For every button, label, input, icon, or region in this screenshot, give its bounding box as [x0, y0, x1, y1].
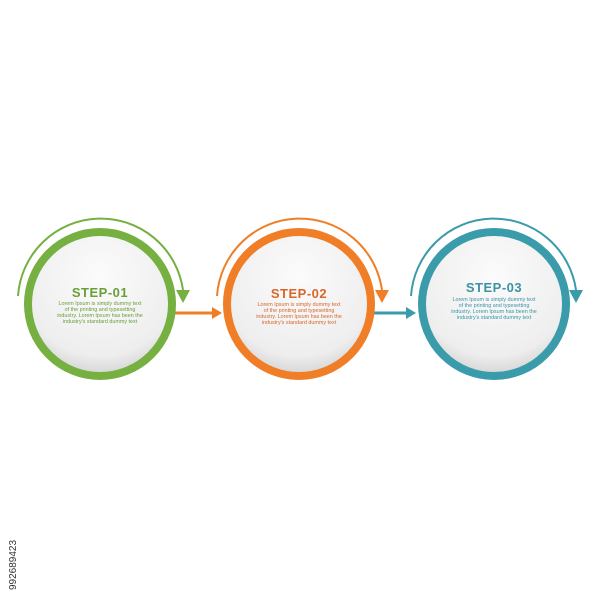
body 3: industry's standard dummy text: [457, 315, 532, 321]
body 1: [57, 301, 143, 325]
arrow: step 1 to 2: [172, 307, 222, 319]
arc arrow 2: [217, 219, 389, 303]
body 3: industry. Lorem Ipsum has been the: [451, 309, 537, 315]
body 2: of the printing and typesetting: [264, 308, 334, 314]
side id text: 992689423: [8, 540, 19, 590]
heading 1: STEP-01: [72, 285, 128, 300]
body 2: Lorem Ipsum is simply dummy text: [258, 302, 341, 308]
body 1: industry. Lorem Ipsum has been the: [57, 313, 143, 319]
body 1: Lorem Ipsum is simply dummy text: [59, 301, 142, 307]
body 1: industry's standard dummy text: [63, 319, 138, 325]
step 3: [411, 219, 583, 376]
body 3: Lorem Ipsum is simply dummy text: [453, 297, 536, 303]
step 1: [18, 219, 190, 376]
arc arrow 1: [18, 219, 190, 303]
arrow: step 2 to 3: [372, 307, 416, 319]
arc arrow 3: [411, 219, 583, 303]
body 3: of the printing and typesetting: [459, 303, 529, 309]
body 2: industry. Lorem Ipsum has been the: [256, 314, 342, 320]
body 2: [256, 302, 342, 326]
body 1: of the printing and typesetting: [65, 307, 135, 313]
heading 2: STEP-02: [271, 286, 327, 301]
body 2: industry's standard dummy text: [262, 320, 337, 326]
body 3: [451, 297, 537, 321]
heading 3: STEP-03: [466, 280, 522, 295]
step 2: [217, 219, 389, 376]
